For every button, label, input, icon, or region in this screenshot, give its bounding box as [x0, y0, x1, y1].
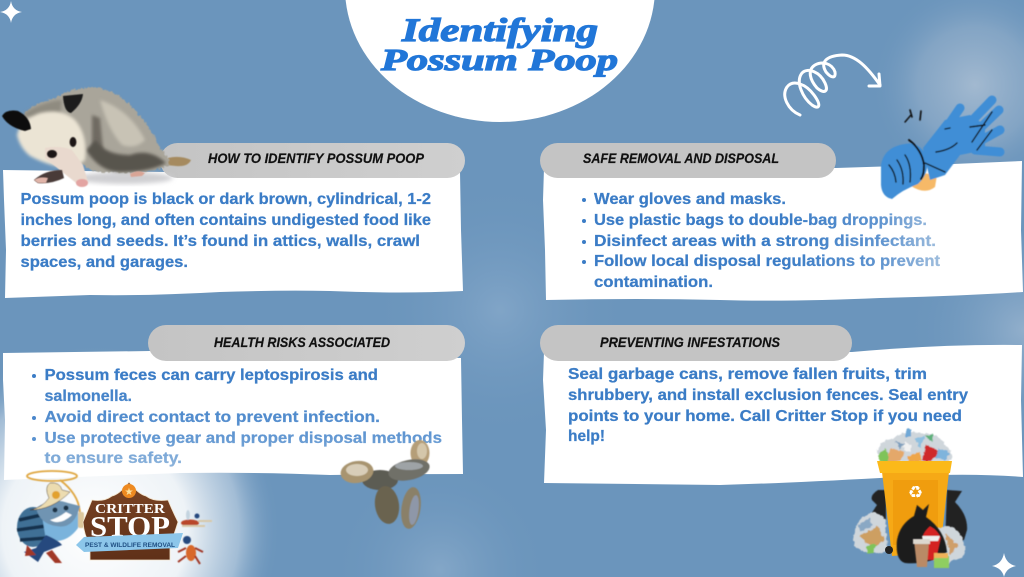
title badge	[345, 0, 655, 122]
can	[882, 472, 949, 556]
panel: preventing infestations	[540, 325, 1023, 485]
body text: Seal garbage cans, remove fallen fruits, trim	[568, 366, 927, 383]
logo insects	[178, 510, 212, 564]
bullet list	[32, 367, 442, 467]
rubbish right	[932, 526, 965, 565]
bullet list: Disinfect areas with a strong disinfectant.	[594, 233, 936, 250]
logo banner	[76, 533, 183, 552]
icon: sparkle bottom right	[992, 553, 1016, 577]
body text: points to your home. Call Critter Stop if you need	[568, 408, 962, 425]
body text: berries and seeds. It’s found in attics, walls, crawl	[20, 233, 420, 250]
logo text: CRITTER	[95, 502, 166, 517]
bullet list: Use protective gear and proper disposal methods	[44, 430, 442, 447]
panel background	[543, 161, 1023, 301]
panel background	[3, 351, 463, 480]
bullet list: Wear gloves and masks.	[594, 191, 786, 208]
bullet list: Avoid direct contact to prevent infection.	[44, 409, 380, 426]
icon: blue glove	[881, 100, 1000, 199]
logo text: STOP	[90, 511, 170, 543]
body text: Possum poop is black or dark brown, cylindrical, 1-2	[20, 191, 431, 208]
icon: trash can and bags: ♻	[908, 483, 923, 503]
bullet list: Possum feces can carry leptospirosis and	[44, 367, 378, 384]
heading pill	[540, 325, 852, 361]
panel background	[3, 170, 463, 298]
icon: possum droppings	[339, 440, 432, 530]
title: Possum Poop	[380, 42, 618, 77]
bullet list: salmonella.	[44, 388, 132, 405]
bullet list: contamination.	[594, 274, 713, 291]
bullet list: Follow local disposal regulations to prevent	[594, 253, 940, 270]
body text	[568, 366, 968, 445]
panel: health risks associated	[3, 325, 465, 480]
body text: spaces, and garages.	[20, 254, 188, 271]
front bag	[897, 504, 947, 563]
bullet list	[582, 191, 940, 291]
heading pill: SAFE REMOVAL AND DISPOSAL	[583, 150, 779, 166]
logo star	[122, 484, 136, 498]
panel: safe removal and disposal	[540, 143, 1023, 301]
title: Identifying	[401, 13, 598, 49]
body text	[20, 191, 431, 271]
title	[380, 13, 618, 77]
logo mascot: raccoon	[17, 471, 84, 563]
heading pill	[148, 325, 465, 361]
heading pill: HOW TO IDENTIFY POSSUM POOP	[208, 150, 425, 166]
bullet list: Use plastic bags to double-bag droppings.	[594, 212, 927, 229]
bullet list: to ensure safety.	[44, 450, 182, 467]
back bags	[868, 490, 886, 522]
body text: shrubbery, and install exclusion fences. Seal entry	[568, 387, 968, 404]
logo star: ★	[125, 487, 134, 498]
heading pill	[540, 143, 836, 178]
logo banner: PEST & WILDLIFE REMOVAL	[85, 542, 175, 549]
panel background	[543, 345, 1023, 485]
panel: how to identify possum poop	[3, 143, 465, 298]
icon: curly arrow	[785, 55, 880, 115]
logo badge	[83, 482, 178, 560]
rubbish on top	[877, 429, 953, 462]
icon: trash can and bags	[853, 429, 967, 568]
rubbish left	[853, 513, 888, 553]
icon: sparkle top left	[0, 1, 22, 23]
icon: possum	[2, 87, 191, 187]
logo: critter stop	[17, 471, 212, 564]
heading pill: PREVENTING INFESTATIONS	[600, 334, 781, 350]
body text: inches long, and often contains undigested food like	[20, 212, 431, 229]
body text: help!	[568, 428, 605, 445]
bottle and cup	[913, 526, 949, 568]
heading pill: HEALTH RISKS ASSOCIATED	[214, 334, 390, 350]
heading pill	[160, 143, 465, 178]
